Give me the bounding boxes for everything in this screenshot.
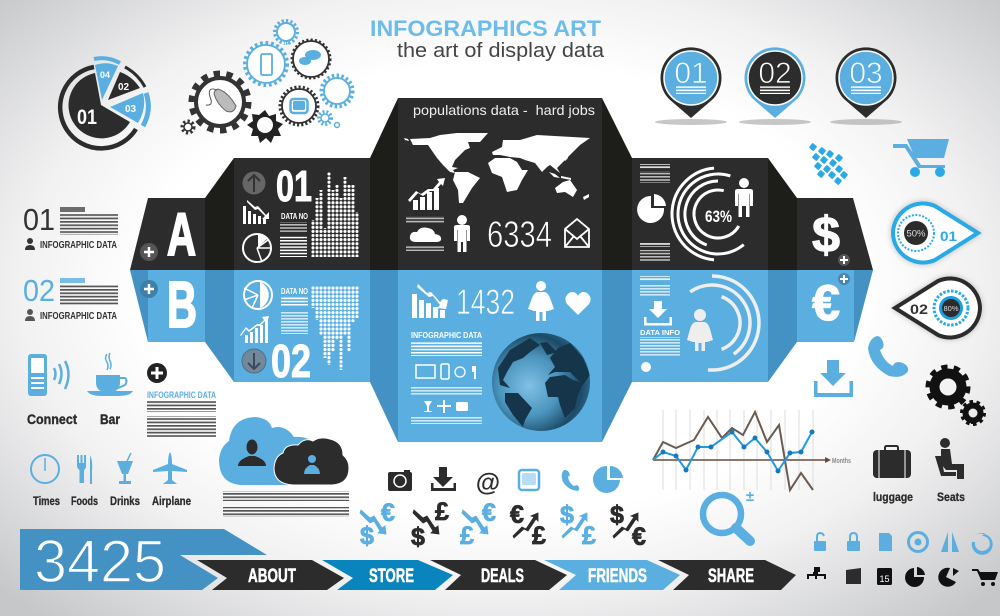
icon: up arrow circle: [242, 172, 266, 194]
icon: phone handset: [868, 336, 908, 377]
dark cloud: [274, 438, 349, 485]
icon: clouds with users: [219, 417, 349, 517]
cluster 3: £: [460, 522, 474, 550]
line chart: Months: [832, 458, 851, 465]
icon: cart: [972, 569, 998, 586]
text stripes: DATA NO: [281, 212, 308, 221]
icon: folder: [846, 568, 861, 584]
icon: times clock: Times: [33, 494, 60, 508]
icon: falling bars: [412, 284, 448, 318]
icon: seat: Seats: [937, 490, 965, 504]
left blue panel content: [240, 281, 359, 387]
icon row: blue utility: [814, 532, 993, 555]
icon: pie: [593, 466, 623, 493]
line chart: [653, 410, 851, 490]
letter A with plus: A: [167, 201, 196, 268]
teardrop 02: 02: [910, 301, 928, 317]
dot hanging chart: [311, 286, 359, 370]
icon: times clock: [31, 455, 60, 508]
icon: connect phone and label: [27, 354, 77, 427]
info block: INFOGRAPHIC DATA: [411, 331, 482, 340]
icon: globe: [492, 333, 590, 431]
pin 03: [830, 47, 902, 125]
cluster 3: [460, 499, 496, 550]
teardrop 01: 01: [940, 228, 957, 244]
letter B with plus: [140, 268, 197, 341]
icon: calendar: 15: [879, 574, 890, 584]
pie chart: top left: 01: [77, 106, 97, 129]
icon: bar cup and label: [87, 353, 133, 427]
icon: seat: [935, 438, 965, 504]
icon: pie exploded: [938, 568, 959, 587]
icon row: camera, download, at, tablet, phone, pie: [388, 466, 623, 497]
cluster 2: [411, 498, 449, 551]
arrow: friends: FRIENDS: [588, 566, 647, 587]
icon: star gear: [247, 110, 283, 143]
icon: hierarchy: [807, 567, 826, 579]
text stripes: [640, 164, 670, 183]
icon: mirrored triangles: [941, 532, 959, 552]
icon: foods cutlery: [71, 455, 98, 508]
icon: drinks glass: [110, 453, 140, 508]
arrow: share: SHARE: [708, 566, 754, 587]
letter A with plus: [140, 201, 196, 268]
cluster 6: [610, 501, 646, 551]
icon: phone: [562, 470, 579, 491]
teardrop 02: [895, 278, 980, 338]
info block: [411, 331, 482, 424]
cluster 2: £: [435, 498, 449, 526]
title: [370, 16, 605, 62]
cluster 5: £: [582, 522, 596, 550]
icon: gears black: [928, 368, 984, 424]
icon: drinks glass: Drinks: [110, 494, 140, 508]
icon: exploded pie: [243, 234, 271, 262]
icon: refresh: [972, 533, 993, 555]
icon: exploded pie: [244, 281, 272, 309]
icon: calendar: [877, 568, 892, 585]
icon: padlock: [847, 533, 860, 551]
icon: target: [908, 532, 928, 552]
icon: download blue: [814, 360, 853, 397]
icon: envelope: [565, 219, 589, 247]
icon: document: [879, 533, 892, 551]
pie chart: top left: 03: [125, 104, 137, 115]
icon: download: [431, 467, 456, 491]
world map: [404, 133, 590, 203]
right blue panel content: [640, 270, 765, 376]
icon: tablet: [519, 470, 539, 490]
banner: 3425: 3425: [34, 528, 166, 595]
icon: woman: [687, 309, 713, 351]
teardrop 01: [893, 203, 978, 263]
icon: man: [735, 178, 753, 217]
text stripes: [640, 242, 670, 262]
pie chart: top left: 04: [100, 70, 110, 80]
left list: 02: INFOGRAPHIC DATA: [40, 311, 117, 322]
number 1432: 1432: [456, 283, 515, 322]
text stripes: DATA NO: [281, 287, 308, 296]
location pins: [655, 47, 902, 125]
icon: camera: [388, 470, 412, 491]
left list: 01: INFOGRAPHIC DATA: [40, 240, 117, 251]
right dark panel content: [637, 158, 774, 270]
icon: rising chart: [408, 178, 445, 210]
panel: B blue band: [130, 270, 873, 442]
icon: luggage: luggage: [873, 490, 913, 504]
panel: A dark band: [130, 98, 873, 270]
left list: 01: 01: [23, 202, 55, 237]
icon: pie: [905, 567, 925, 587]
arrow: share: [658, 560, 796, 590]
icon: woman: [528, 281, 554, 321]
cloud block: [406, 216, 444, 251]
blue cloud: [219, 417, 330, 485]
title: INFOGRAPHICS ART: [370, 16, 602, 41]
radial arcs with 63%: 63%: [705, 207, 732, 226]
currency arrow icons: [360, 498, 646, 551]
teardrop 01: 50%: [906, 228, 926, 240]
left list: 02: 02: [23, 273, 55, 308]
pin 01: [655, 47, 727, 125]
teardrop 02: 80%: [943, 304, 959, 313]
icon: blue gear right: [322, 76, 352, 106]
stripes: [223, 491, 349, 517]
arrow: deals: [430, 560, 567, 590]
icon: man: [454, 215, 470, 252]
arrow: about: ABOUT: [248, 566, 296, 587]
icon: falling bars: [243, 200, 269, 224]
cluster 3: €: [482, 499, 496, 527]
icon: rising bars: [240, 316, 269, 343]
banner: 3425: [20, 528, 267, 595]
left list: 02: [23, 273, 118, 322]
icon: bar cup and label: Bar: [100, 411, 120, 427]
arrow: store: [322, 560, 453, 590]
text stripes: DATA INFO: [640, 330, 681, 337]
icon: luggage: [873, 446, 913, 504]
radial arcs: [659, 270, 765, 376]
cluster 1: €: [381, 499, 395, 527]
pin 02: [739, 47, 811, 125]
number 6334: 6334: [487, 214, 552, 255]
icon: shopping cart: [893, 139, 949, 177]
pin 03: 03: [849, 57, 883, 90]
cluster 5: [560, 501, 596, 550]
arrow: deals: DEALS: [481, 566, 524, 587]
icon: at sign: @: [476, 469, 500, 497]
icon: small dark gear: [182, 121, 194, 133]
text block with plus: [147, 363, 216, 437]
icon: large gear with mouse: [192, 74, 248, 130]
heading: populations data - hard jobs: [413, 102, 595, 118]
icon: tiny blue gears: [319, 112, 340, 128]
icon: foods cutlery: Foods: [71, 494, 98, 508]
icon: screen gear: [280, 87, 318, 125]
cluster 1: $: [360, 522, 374, 550]
center dark panel content: [404, 102, 595, 255]
pie chart: top left: [60, 58, 148, 148]
icon: chat gear: [292, 40, 330, 78]
text block with plus: INFOGRAPHIC DATA: [147, 390, 216, 400]
cluster 1: [360, 499, 395, 550]
number 02: 02: [271, 335, 311, 387]
cluster 4: £: [532, 522, 546, 550]
pin 02: 02: [758, 57, 792, 90]
icon: airplane: Airplane: [152, 494, 191, 508]
cluster 6: €: [632, 523, 646, 551]
cluster 6: $: [610, 501, 624, 529]
left list: 01: [23, 202, 118, 251]
icon: magnifier: ±: [746, 488, 754, 505]
text stripes: [640, 276, 670, 296]
cluster 5: $: [560, 501, 574, 529]
cluster 4: [510, 501, 546, 550]
icon: small blue gear top: [274, 20, 298, 44]
icon: down arrow circle: [242, 349, 266, 373]
pie chart: top left: 02: [118, 82, 130, 93]
icon: euro with plus: €: [812, 275, 840, 331]
letter B with plus: B: [167, 268, 197, 341]
icon: dollar with plus: [812, 207, 850, 266]
left dark panel content: [242, 162, 359, 262]
icon: airplane: [152, 452, 191, 508]
icon row: dark utility: [807, 567, 998, 587]
number 01: 01: [276, 162, 312, 211]
cluster 4: €: [510, 501, 524, 529]
icon: unlocked padlock: [814, 533, 826, 551]
title: the art of display data: [397, 40, 605, 62]
pin 01: 01: [674, 57, 708, 90]
icon: magnifier: [703, 488, 754, 541]
icon: download: [644, 301, 672, 326]
cluster 2: $: [411, 523, 425, 551]
dot skyline chart: [311, 172, 359, 257]
user dark: [238, 440, 266, 466]
arrow: store: STORE: [369, 566, 414, 587]
center blue panel content: [411, 281, 591, 431]
icon: heart: [565, 292, 591, 315]
icon: dollar with plus: $: [812, 207, 840, 263]
gears cluster: [182, 20, 352, 143]
arrow: about: [197, 560, 344, 590]
icon: pie: [637, 194, 666, 223]
icon: connect phone and label: Connect: [27, 411, 77, 427]
icon: phone gear: [245, 43, 287, 85]
arrow: friends: [544, 560, 680, 590]
user blue: [304, 455, 320, 474]
icon: diamond pattern: [809, 143, 848, 185]
panel: main folded shape: [130, 98, 873, 442]
